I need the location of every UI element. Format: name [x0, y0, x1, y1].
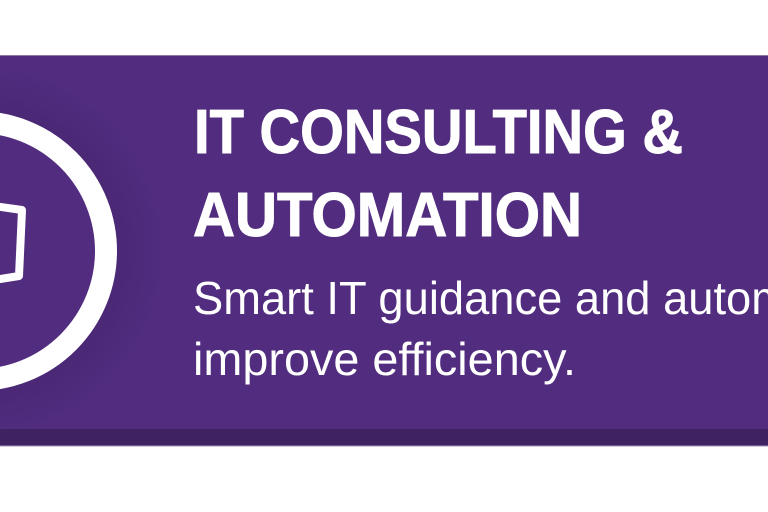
description text: improve efficiency. — [193, 333, 576, 385]
heading: IT CONSULTING & — [194, 98, 683, 167]
heading: AUTOMATION — [193, 181, 582, 250]
description text — [193, 272, 768, 385]
icon: circle badge with tilted screen — [0, 66, 162, 436]
panel: purple band — [0, 55, 768, 446]
heading — [193, 98, 683, 250]
